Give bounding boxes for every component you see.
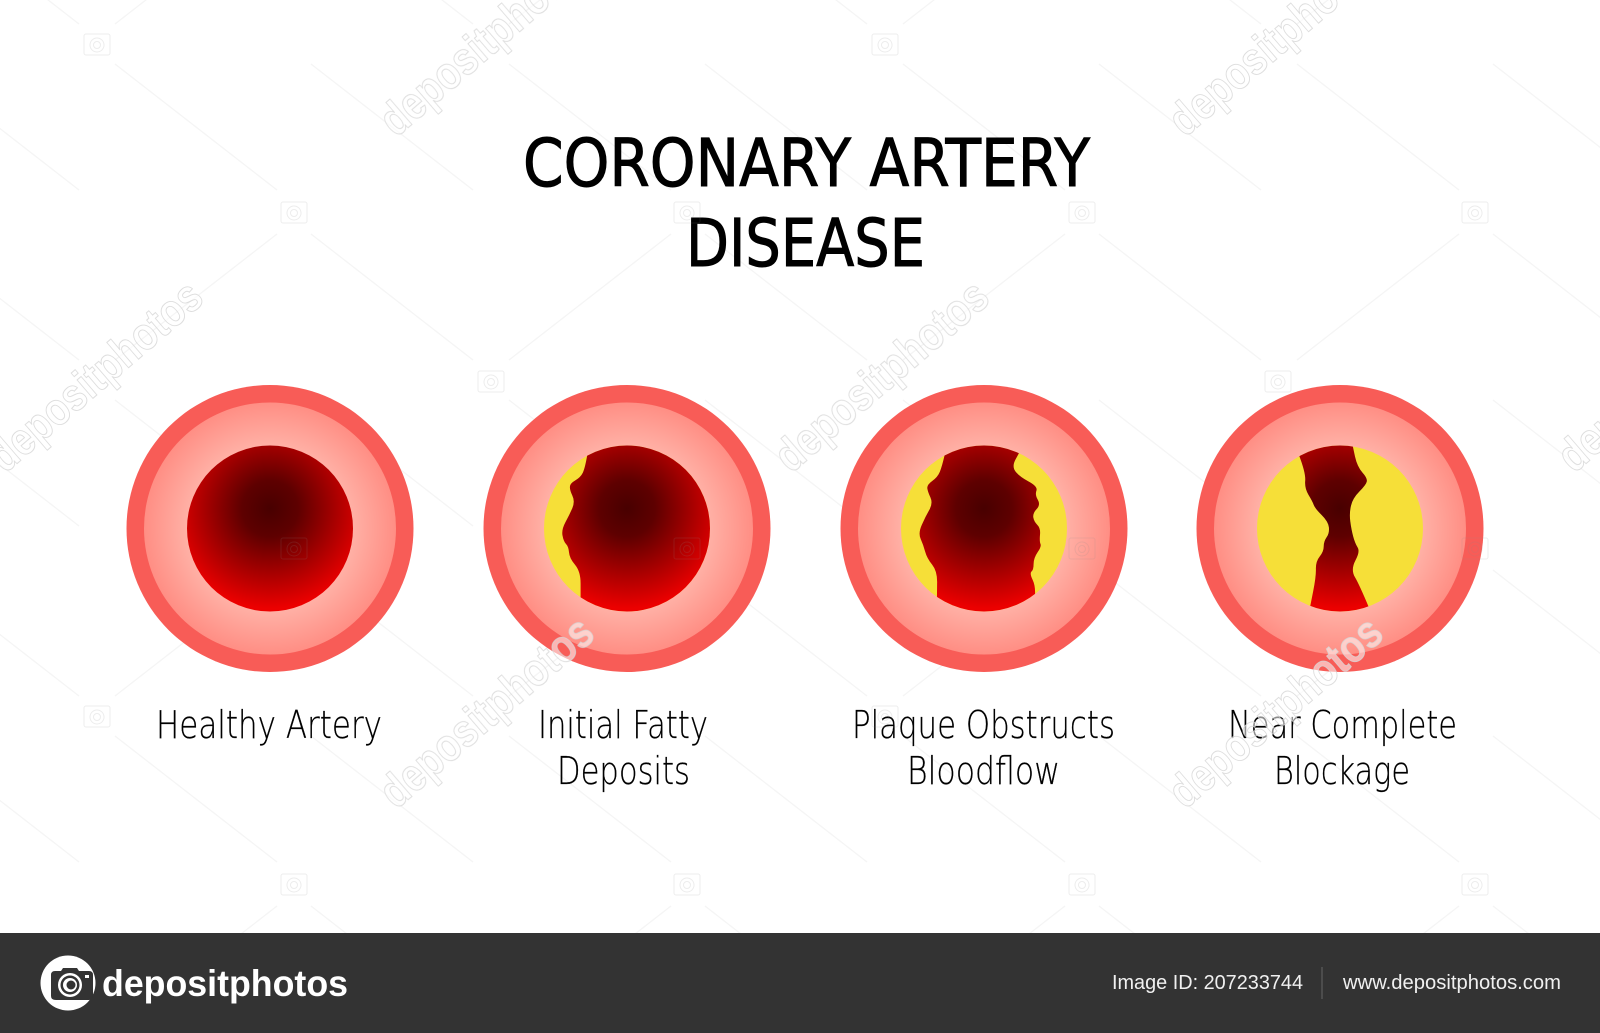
- footer bar: [0, 933, 1600, 1033]
- logo wordmark: depositphotos: [102, 963, 348, 1004]
- artery inner wall: [1214, 402, 1466, 654]
- label: plaque obstructs bloodflow: [852, 703, 1115, 793]
- label: near complete blockage: Near Complete: [1228, 703, 1457, 747]
- open lumen with blood: [187, 446, 353, 612]
- artery outer wall: [1196, 385, 1484, 672]
- artery outer wall: [840, 385, 1128, 672]
- panel: near complete blockage: [1196, 385, 1484, 672]
- watermark overlay: depositphotos: [764, 269, 998, 482]
- title: DISEASE: [686, 205, 925, 282]
- yellow plaque: [544, 446, 710, 612]
- yellow plaque: [901, 446, 1067, 612]
- narrowed lumen with blood: [562, 446, 710, 612]
- artery inner wall: [858, 402, 1110, 654]
- title: [523, 125, 1091, 282]
- website: www.depositphotos.com: [1342, 972, 1561, 994]
- watermark overlay: depositphotos: [369, 605, 603, 818]
- label: initial fatty deposits: [538, 703, 708, 793]
- yellow plaque: [1257, 446, 1423, 612]
- label: plaque obstructs bloodflow: Plaque Obstructs: [852, 703, 1115, 747]
- label: healthy artery: Healthy Artery: [156, 703, 382, 747]
- panel: plaque obstructs bloodflow: [840, 385, 1128, 672]
- panel: initial fatty deposits: [484, 385, 770, 672]
- image id: Image ID: 207233744: [1112, 972, 1303, 994]
- artery inner wall: [501, 402, 753, 654]
- label: initial fatty deposits: Initial Fatty: [538, 703, 708, 747]
- artery outer wall: [484, 385, 770, 672]
- narrow lumen with blood: [1299, 438, 1369, 618]
- artery outer wall: [126, 385, 414, 672]
- icon: camera logo: [40, 956, 96, 1010]
- panel: healthy artery: [126, 385, 414, 672]
- label: initial fatty deposits: Deposits: [557, 749, 690, 793]
- narrowed lumen with blood: [920, 438, 1041, 618]
- label: near complete blockage: Blockage: [1274, 749, 1410, 793]
- label: plaque obstructs bloodflow: Bloodflow: [907, 749, 1060, 793]
- artery inner wall: [144, 402, 396, 654]
- watermark overlay: depositphotos: [1158, 605, 1392, 818]
- label: near complete blockage: [1228, 703, 1457, 793]
- title: CORONARY ARTERY: [523, 125, 1091, 202]
